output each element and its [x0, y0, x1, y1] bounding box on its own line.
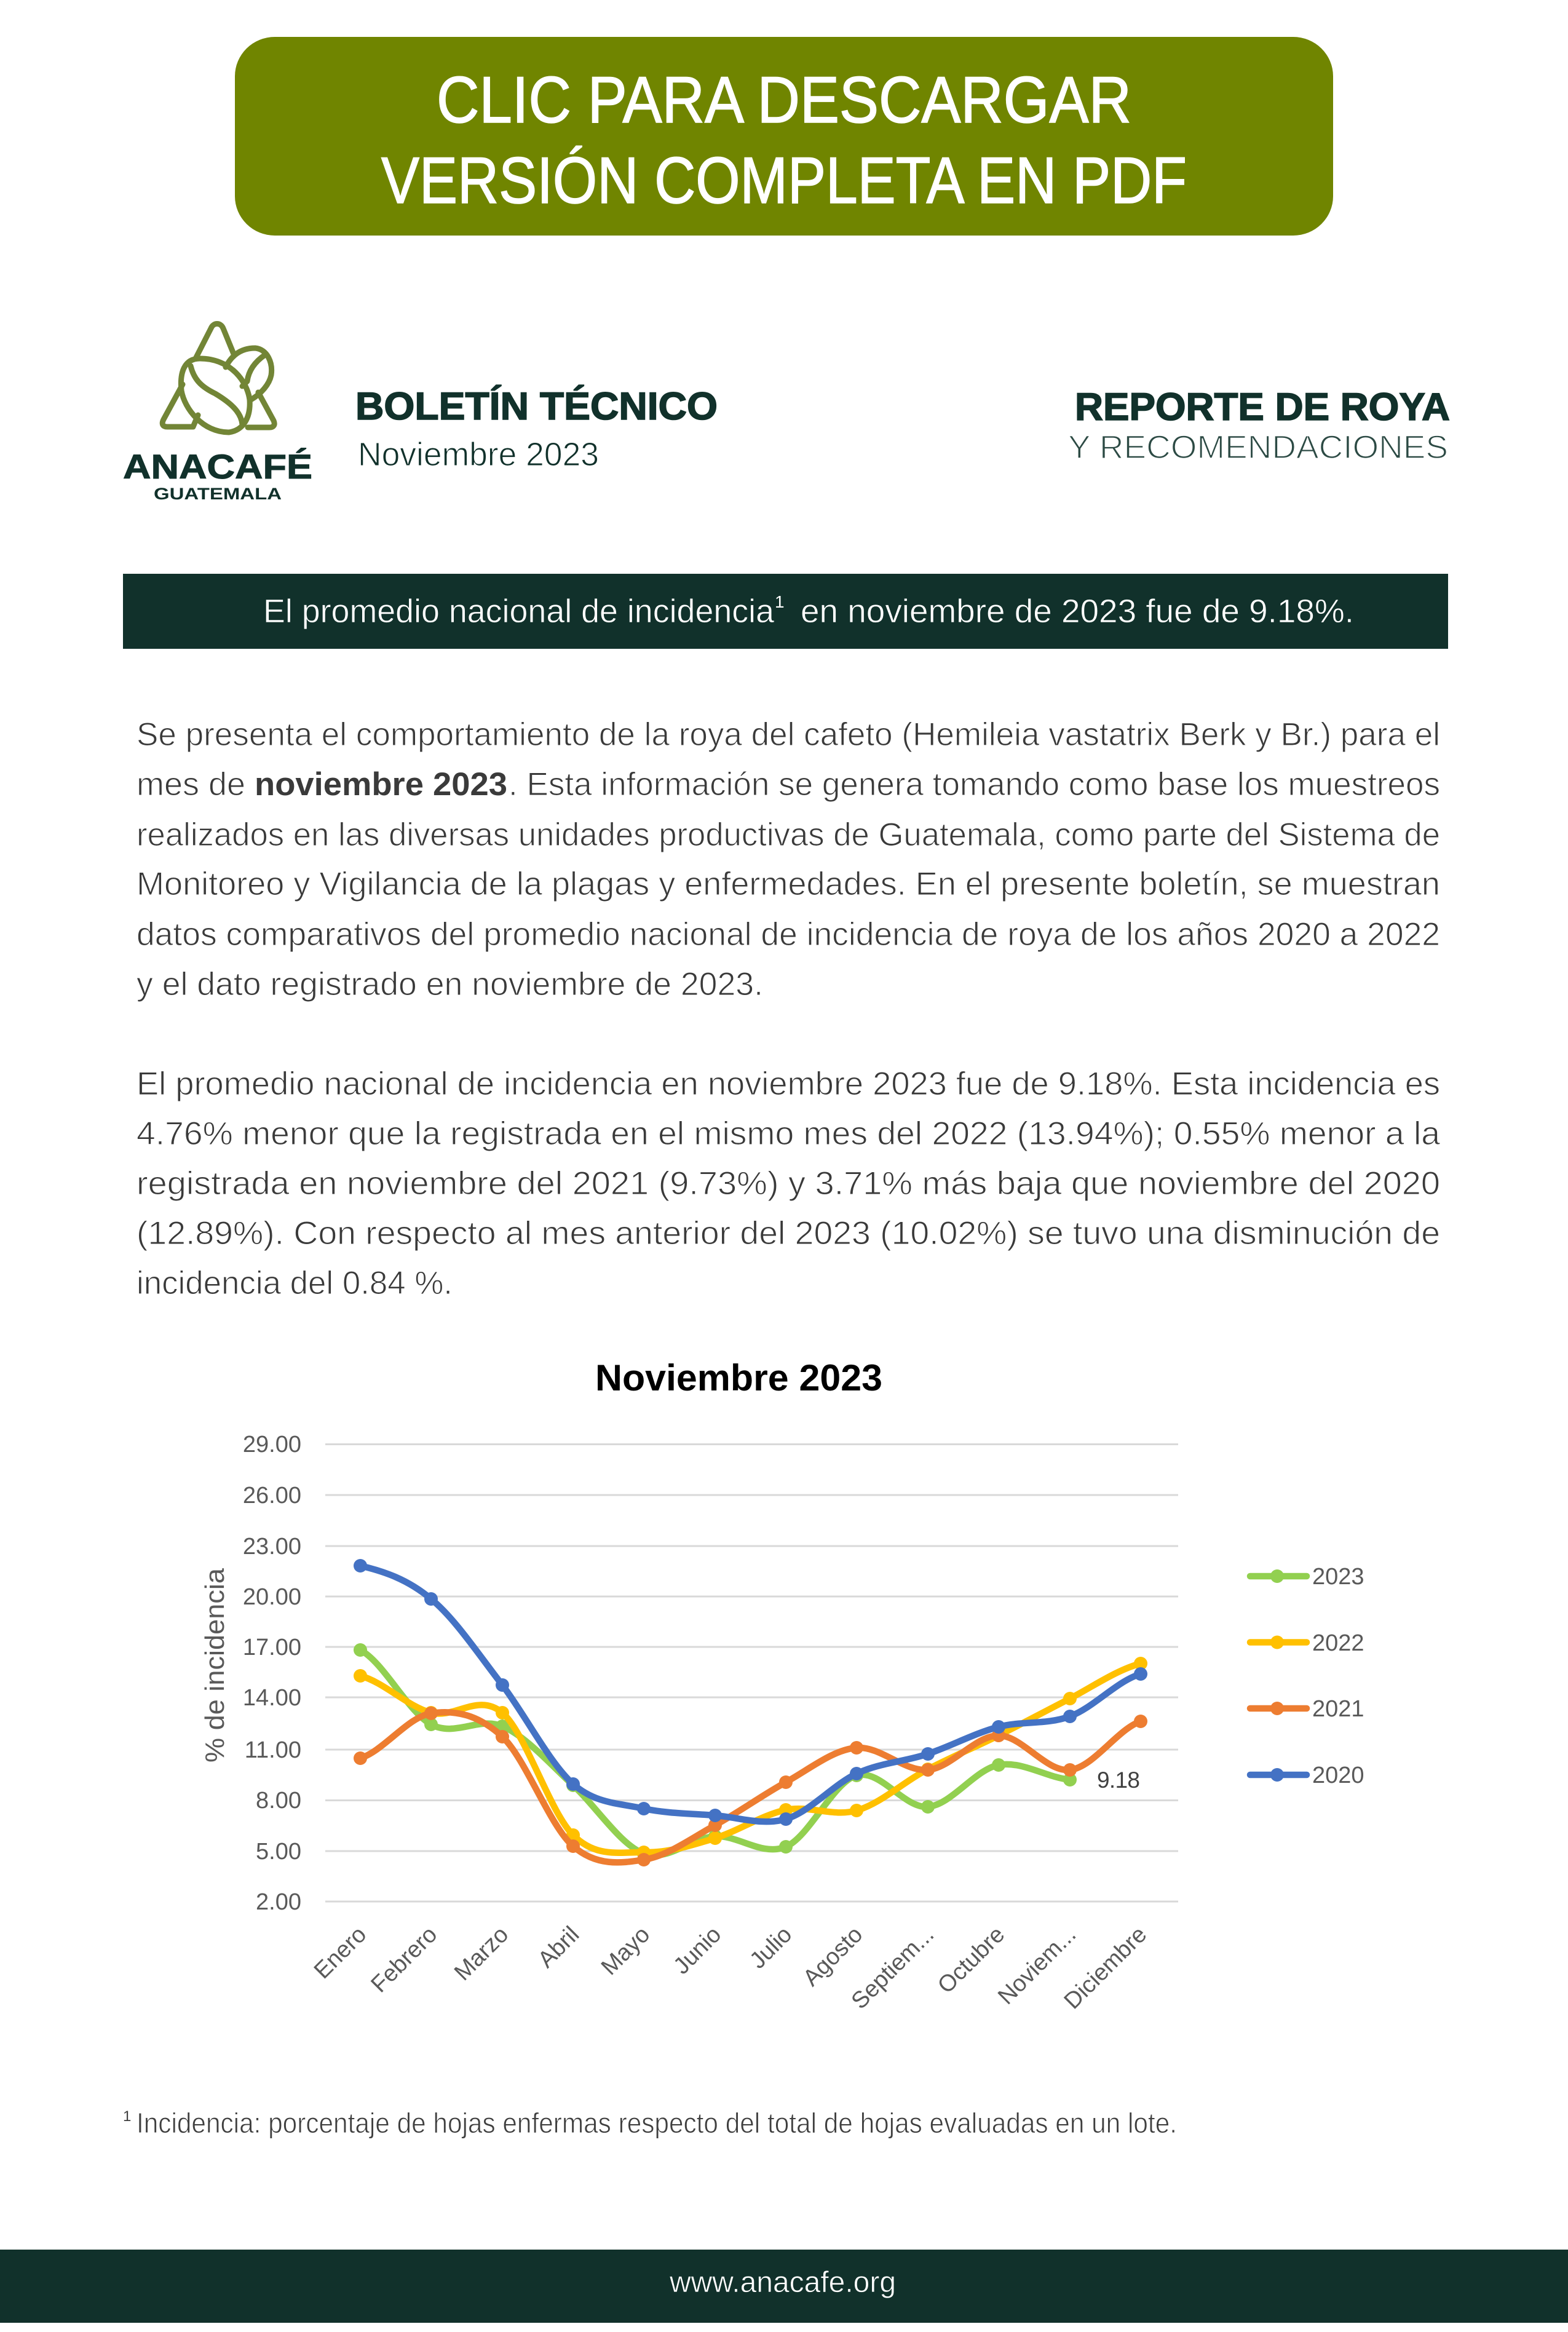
text block: paragraph 1: Monitoreo y Vigilancia de la plagas y enfermedades. En el presente boletín, se muestran	[137, 866, 1440, 902]
text block: paragraph 1	[137, 716, 1440, 1002]
text block: paragraph 2: (12.89%). Con respecto al mes anterior del 2023 (10.02%) se tuvo una disminución de	[137, 1215, 1440, 1251]
y axis labels: 11.00	[245, 1737, 301, 1763]
x axis labels: Abril	[533, 1922, 584, 1973]
download button: CLIC PARA DESCARGAR	[437, 63, 1131, 137]
y axis labels: 26.00	[243, 1483, 301, 1509]
legend: 2022	[1312, 1630, 1364, 1656]
x axis labels: Junio	[668, 1922, 726, 1980]
legend: 2023	[1312, 1564, 1364, 1590]
text block: paragraph 1: noviembre 2023	[255, 766, 507, 803]
x axis labels: Octubre	[933, 1922, 1010, 1999]
y axis title: % de incidencia	[200, 1568, 230, 1763]
text block: paragraph 2	[137, 1066, 1441, 1301]
x axis labels: Noviem...	[993, 1922, 1081, 2010]
x axis labels: Enero	[309, 1922, 371, 1984]
text block: paragraph 1: Se presenta el comportamiento de la roya del cafeto (Hemileia vastatrix Berk y Br.) para el	[137, 716, 1440, 753]
banner: national average: El promedio nacional de incidencia	[263, 593, 775, 630]
data label 9.18: 9.18	[1097, 1767, 1140, 1793]
date: noviembre 2023: Noviembre 2023	[358, 436, 599, 473]
x axis labels: Diciembre	[1059, 1922, 1152, 2014]
y axis labels: 5.00	[256, 1839, 301, 1865]
x axis labels: Agosto	[798, 1922, 868, 1991]
text block: paragraph 2: registrada en noviembre del 2021 (9.73%) y 3.71% más baja que noviembre del 2020	[137, 1165, 1440, 1202]
banner: national average: 1	[775, 592, 785, 611]
download button	[235, 37, 1333, 236]
text block: paragraph 1: datos comparativos del promedio nacional de incidencia de roya de los años 2020 a 2022	[137, 916, 1440, 953]
text block: paragraph 2: incidencia del 0.84 %.	[137, 1265, 453, 1301]
legend: 2020	[1312, 1763, 1364, 1788]
text block: paragraph 2: El promedio nacional de incidencia en noviembre 2023 fue de 9.18%. Esta incidencia es	[137, 1066, 1440, 1102]
x axis labels: Julio	[745, 1922, 797, 1974]
footnote: Incidencia: porcentaje de hojas enfermas respecto del total de hojas evaluadas en un lote.	[137, 2107, 1177, 2139]
footnote: 1	[123, 2108, 131, 2125]
logo subtitle: GUATEMALA	[154, 485, 282, 503]
text block: paragraph 1: y el dato registrado en noviembre de 2023.	[137, 966, 763, 1002]
y axis labels	[243, 1432, 301, 1915]
y axis labels: 2.00	[256, 1889, 301, 1915]
x axis labels: Febrero	[366, 1922, 442, 1997]
line chart: incidencia	[200, 1432, 1364, 2014]
x axis labels: Mayo	[596, 1922, 655, 1980]
y axis labels: 23.00	[243, 1534, 301, 1560]
y axis labels: 20.00	[243, 1584, 301, 1610]
y axis labels: 8.00	[256, 1788, 301, 1814]
series 2022	[354, 1657, 1147, 1859]
chart title: Noviembre 2023	[595, 1357, 882, 1398]
logo wordmark: ANACAFÉ	[123, 447, 312, 486]
icon: mountain and coffee bean	[162, 323, 274, 432]
y axis labels: 17.00	[243, 1635, 301, 1660]
heading: boletín técnico: BOLETÍN TÉCNICO	[355, 385, 718, 428]
series 2023	[354, 1643, 1077, 1860]
download button: VERSIÓN COMPLETA EN PDF	[381, 143, 1187, 217]
legend: 2021	[1312, 1696, 1364, 1722]
heading: reporte de roya: REPORTE DE ROYA	[1075, 386, 1450, 429]
x axis labels: Marzo	[449, 1922, 513, 1986]
x axis labels	[309, 1922, 1152, 2014]
banner: national average	[123, 574, 1448, 649]
y axis labels: 29.00	[243, 1432, 301, 1458]
footer bar: www.anacafe.org	[669, 2266, 896, 2299]
logo: Anacafé Guatemala	[123, 323, 312, 503]
banner: national average: en noviembre de 2023 fue de 9.18%.	[801, 593, 1354, 630]
text block: paragraph 1: . Esta información se genera tomando como base los muestreos	[509, 766, 1440, 803]
y axis labels: 14.00	[243, 1685, 301, 1711]
series 2020	[354, 1559, 1147, 1826]
legend	[1250, 1564, 1364, 1788]
x axis labels: Septiem...	[847, 1922, 939, 2014]
text block: paragraph 1: mes de	[137, 766, 245, 803]
footer bar	[0, 2250, 1568, 2323]
text block: paragraph 1: realizados en las diversas unidades productivas de Guatemala, como parte del Sistema de	[137, 817, 1440, 853]
text block: paragraph 2: 4.76% menor que la registrada en el mismo mes del 2022 (13.94%); 0.55% menor a la	[137, 1116, 1441, 1152]
series 2021	[354, 1707, 1147, 1866]
subheading: y recomendaciones: Y RECOMENDACIONES	[1068, 429, 1448, 466]
